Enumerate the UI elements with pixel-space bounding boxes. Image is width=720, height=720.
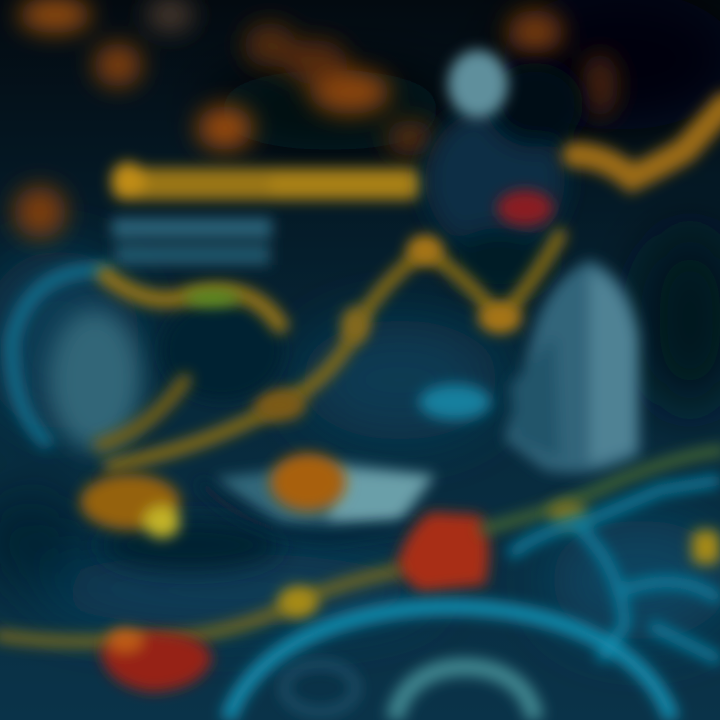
- lower gold line: [0, 570, 400, 642]
- orange ball on tray: [270, 453, 346, 511]
- gold line nodes: [254, 235, 522, 421]
- rising gold line chart: [110, 235, 560, 465]
- heading bar: [111, 162, 422, 200]
- large cyan ring: [228, 607, 672, 720]
- gold line dot: [278, 586, 318, 618]
- figure head: [448, 50, 508, 118]
- yellow dot far right: [692, 530, 720, 564]
- gold dot right: [548, 501, 588, 527]
- inner ring: [395, 667, 535, 720]
- pale tray: [215, 462, 435, 525]
- gauge pale centre: [49, 310, 141, 450]
- gauge dark dial: [168, 352, 274, 399]
- dark figure: [425, 63, 583, 296]
- right gold line: [480, 450, 720, 530]
- gauge green highlight: [184, 289, 240, 307]
- gauge gold arc: [105, 275, 280, 325]
- left gauge ring: [12, 270, 110, 445]
- red coin: [100, 628, 212, 692]
- cyan network lines: [510, 480, 720, 660]
- tray dark edge: [253, 512, 410, 537]
- subheading text block: [112, 218, 272, 265]
- gold coin cluster: [80, 474, 180, 538]
- scattered orange bokeh dots: [14, 0, 618, 238]
- dark centre panel: [100, 519, 280, 571]
- red block: [395, 512, 489, 592]
- lower gold arc: [100, 380, 185, 445]
- upper right orange line: [575, 105, 720, 178]
- ring inner detail: [284, 664, 356, 712]
- cyan highlight: [419, 384, 491, 420]
- red accent on figure: [497, 190, 553, 226]
- right tall pale shape: [505, 260, 640, 473]
